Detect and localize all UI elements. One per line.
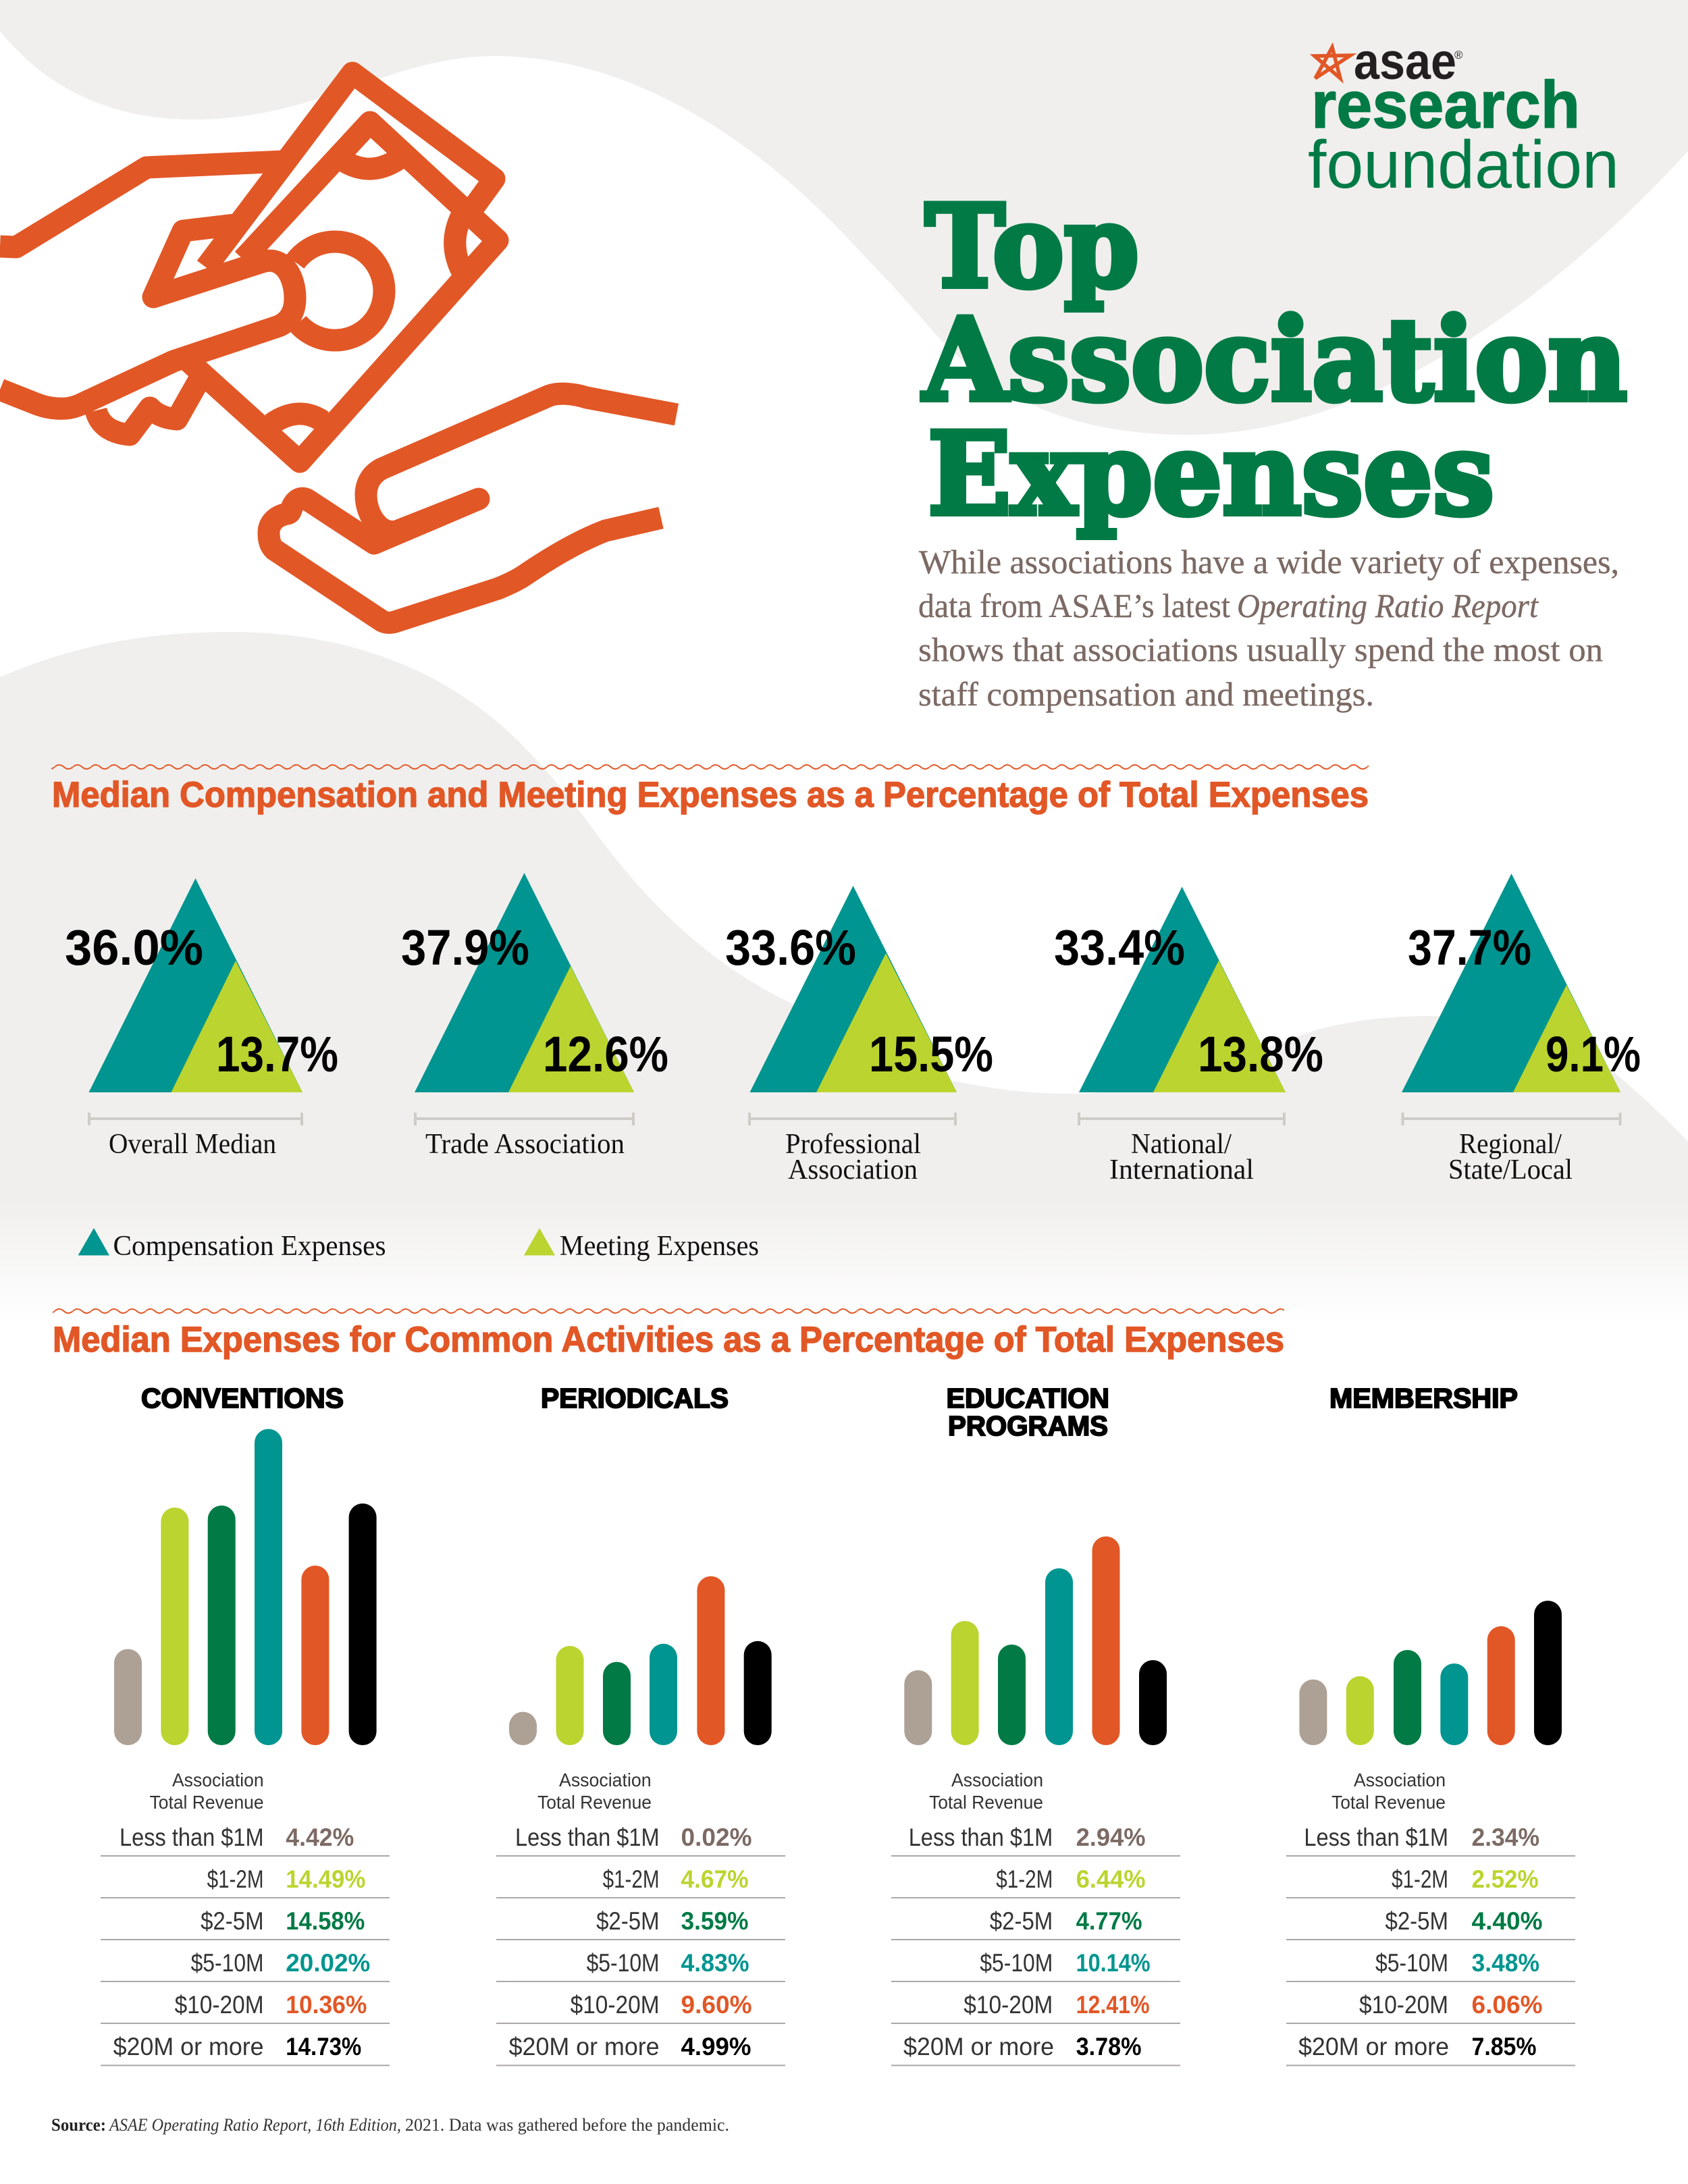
intro text: Operating Ratio Report: [1237, 587, 1539, 624]
icon: banknote centre circle: [295, 242, 384, 340]
data table: 6.44%: [1076, 1865, 1146, 1893]
data table: 7.85%: [1472, 2033, 1537, 2060]
data table: 4.42%: [286, 1823, 354, 1851]
data table: $1-2M: [603, 1865, 660, 1893]
category label: National/: [1131, 1129, 1232, 1160]
heading: PROGRAMS: [948, 1410, 1108, 1441]
panel: trade association: [401, 873, 668, 1160]
meeting value: 13.8%: [1198, 1026, 1323, 1082]
title: Expenses: [928, 407, 1494, 541]
panel: periodicals: [496, 1383, 785, 2065]
logo word: research: research: [1311, 68, 1580, 142]
intro text: staff compensation and meetings.: [918, 675, 1374, 713]
data table: 4.83%: [681, 1949, 749, 1977]
panel: national/international: [1054, 887, 1323, 1186]
icon: rear banknote: [206, 73, 494, 267]
table header: Association: [951, 1769, 1043, 1790]
panel: conventions: [101, 1383, 390, 2065]
data table: [496, 1823, 785, 2065]
compensation value: 33.4%: [1054, 920, 1185, 976]
legend: compensation expenses: Compensation Expenses: [113, 1231, 386, 1262]
data table: $20M or more: [1298, 2033, 1449, 2060]
category label: State/Local: [1448, 1154, 1573, 1186]
triangle chart: [415, 873, 634, 1092]
data table: 10.36%: [286, 1991, 367, 2019]
category label: [785, 1129, 921, 1186]
source note: [51, 2115, 729, 2135]
source note: Source:: [51, 2115, 106, 2135]
data table: 3.59%: [681, 1907, 748, 1935]
intro text: While associations have a wide variety of expenses,: [919, 543, 1619, 581]
table header: Total Revenue: [537, 1792, 652, 1813]
intro text: data from ASAE’s latest: [918, 587, 1230, 624]
heading: EDUCATION: [947, 1383, 1109, 1414]
triangle chart: [749, 886, 957, 1092]
title: [922, 180, 1627, 541]
icon: asae star: [1315, 47, 1350, 78]
triangle chart: [1079, 887, 1286, 1092]
bar chart: [509, 1576, 772, 1745]
meeting value: 13.7%: [216, 1026, 338, 1082]
data table: $5-10M: [191, 1949, 264, 1977]
category label: Professional: [785, 1129, 921, 1160]
category label: [1109, 1129, 1254, 1186]
data table: 4.77%: [1076, 1907, 1142, 1935]
data table: $2-5M: [201, 1907, 264, 1935]
data table: $1-2M: [207, 1865, 264, 1893]
data table: 4.99%: [681, 2033, 751, 2060]
table header: Association: [559, 1769, 652, 1790]
data table: 3.78%: [1076, 2033, 1142, 2060]
panel: overall median: [65, 878, 338, 1160]
table header: Total Revenue: [150, 1792, 264, 1813]
triangle chart: [1402, 874, 1620, 1092]
data table: Less than $1M: [1304, 1823, 1448, 1851]
table header: Association: [172, 1769, 264, 1790]
title: Top: [925, 180, 1139, 313]
icon: receiving hand: [366, 394, 677, 532]
data table: $5-10M: [587, 1949, 660, 1977]
category label: International: [1109, 1154, 1254, 1186]
data table: 0.02%: [681, 1823, 752, 1851]
data table: Less than $1M: [909, 1823, 1053, 1851]
data table: [891, 1823, 1180, 2065]
data table: 14.73%: [286, 2033, 361, 2060]
data table: 10.14%: [1076, 1949, 1151, 1977]
data table: $2-5M: [990, 1907, 1053, 1935]
data table: $10-20M: [175, 1991, 264, 2019]
data table: 9.60%: [681, 1991, 752, 2019]
data table: 4.67%: [681, 1865, 748, 1893]
heading: CONVENTIONS: [141, 1383, 344, 1414]
bar chart: [1299, 1601, 1562, 1745]
triangle chart: [89, 878, 302, 1092]
data table: $5-10M: [1375, 1949, 1448, 1977]
panel: membership: [1286, 1383, 1575, 2065]
data table: $1-2M: [996, 1865, 1053, 1893]
section heading: compensation and meeting expenses: Median Compensation and Meeting Expenses as a Percentage of Total Expenses: [52, 775, 1369, 815]
title: Association: [922, 293, 1627, 427]
icon: banknote corner arcs: [271, 159, 463, 424]
data table: 4.40%: [1472, 1907, 1542, 1935]
compensation value: 33.6%: [725, 920, 856, 976]
data table: 20.02%: [286, 1949, 370, 1977]
data table: 6.06%: [1472, 1991, 1542, 2019]
data table: 2.52%: [1472, 1865, 1538, 1893]
table header: Association: [1354, 1769, 1446, 1790]
logo word: asae: asae: [1354, 33, 1456, 90]
data table: $5-10M: [980, 1949, 1053, 1977]
table header: Total Revenue: [1331, 1792, 1446, 1813]
logo word: foundation: foundation: [1308, 127, 1619, 203]
data table: $10-20M: [571, 1991, 660, 2019]
intro text: [918, 543, 1619, 713]
compensation value: 37.7%: [1408, 920, 1531, 976]
data table: $2-5M: [1386, 1907, 1448, 1935]
category label: Regional/: [1459, 1129, 1562, 1160]
meeting value: 12.6%: [543, 1026, 668, 1082]
data table: [1286, 1823, 1575, 2065]
table header: [150, 1769, 264, 1813]
data table: 14.58%: [286, 1907, 365, 1935]
data table: Less than $1M: [120, 1823, 264, 1851]
section heading: common activities: Median Expenses for Common Activities as a Percentage of Total Expenses: [53, 1320, 1284, 1360]
panel: education programs: [891, 1383, 1180, 2065]
source note: 2021. Data was gathered before the pandemic.: [405, 2115, 729, 2135]
meeting value: 15.5%: [869, 1026, 993, 1082]
bar chart: [114, 1429, 377, 1745]
compensation value: 36.0%: [65, 920, 203, 976]
data table: $10-20M: [964, 1991, 1053, 2019]
logo: asae research foundation: [1308, 33, 1619, 203]
heading: [947, 1383, 1109, 1441]
heading: MEMBERSHIP: [1329, 1383, 1518, 1414]
data table: $20M or more: [113, 2033, 264, 2060]
icon: front banknote: [188, 122, 498, 462]
data table: [101, 1823, 390, 2065]
compensation value: 37.9%: [401, 920, 529, 976]
data table: 2.94%: [1076, 1823, 1146, 1851]
table header: [929, 1769, 1043, 1813]
data table: 3.48%: [1472, 1949, 1539, 1977]
table header: Total Revenue: [929, 1792, 1043, 1813]
category label: Trade Association: [425, 1129, 625, 1160]
legend: [78, 1228, 759, 1262]
heading: PERIODICALS: [541, 1383, 729, 1414]
data table: $10-20M: [1359, 1991, 1448, 2019]
category label: Overall Median: [109, 1129, 276, 1160]
data table: 12.41%: [1076, 1991, 1150, 2019]
intro text: shows that associations usually spend the most on: [918, 631, 1603, 668]
table header: [1331, 1769, 1446, 1813]
data table: $20M or more: [903, 2033, 1054, 2060]
data table: Less than $1M: [515, 1823, 660, 1851]
panel: professional association: [725, 886, 993, 1186]
data table: $20M or more: [509, 2033, 660, 2060]
data table: 2.34%: [1472, 1823, 1539, 1851]
category label: Association: [788, 1154, 918, 1186]
legend: meeting expenses: Meeting Expenses: [560, 1231, 759, 1262]
source note: ASAE Operating Ratio Report, 16th Edition,: [108, 2115, 401, 2135]
meeting value: 9.1%: [1546, 1026, 1641, 1082]
data table: $2-5M: [596, 1907, 660, 1935]
icon: giving hand: [0, 161, 295, 435]
logo: asae research foundation: ®: [1454, 49, 1463, 61]
icon: hands exchanging money: [0, 73, 677, 622]
data table: $1-2M: [1392, 1865, 1448, 1893]
bar chart: [904, 1537, 1167, 1745]
table header: [537, 1769, 652, 1813]
data table: 14.49%: [286, 1865, 365, 1893]
category label: [1448, 1129, 1573, 1186]
panel: regional/state/local: [1402, 874, 1641, 1186]
